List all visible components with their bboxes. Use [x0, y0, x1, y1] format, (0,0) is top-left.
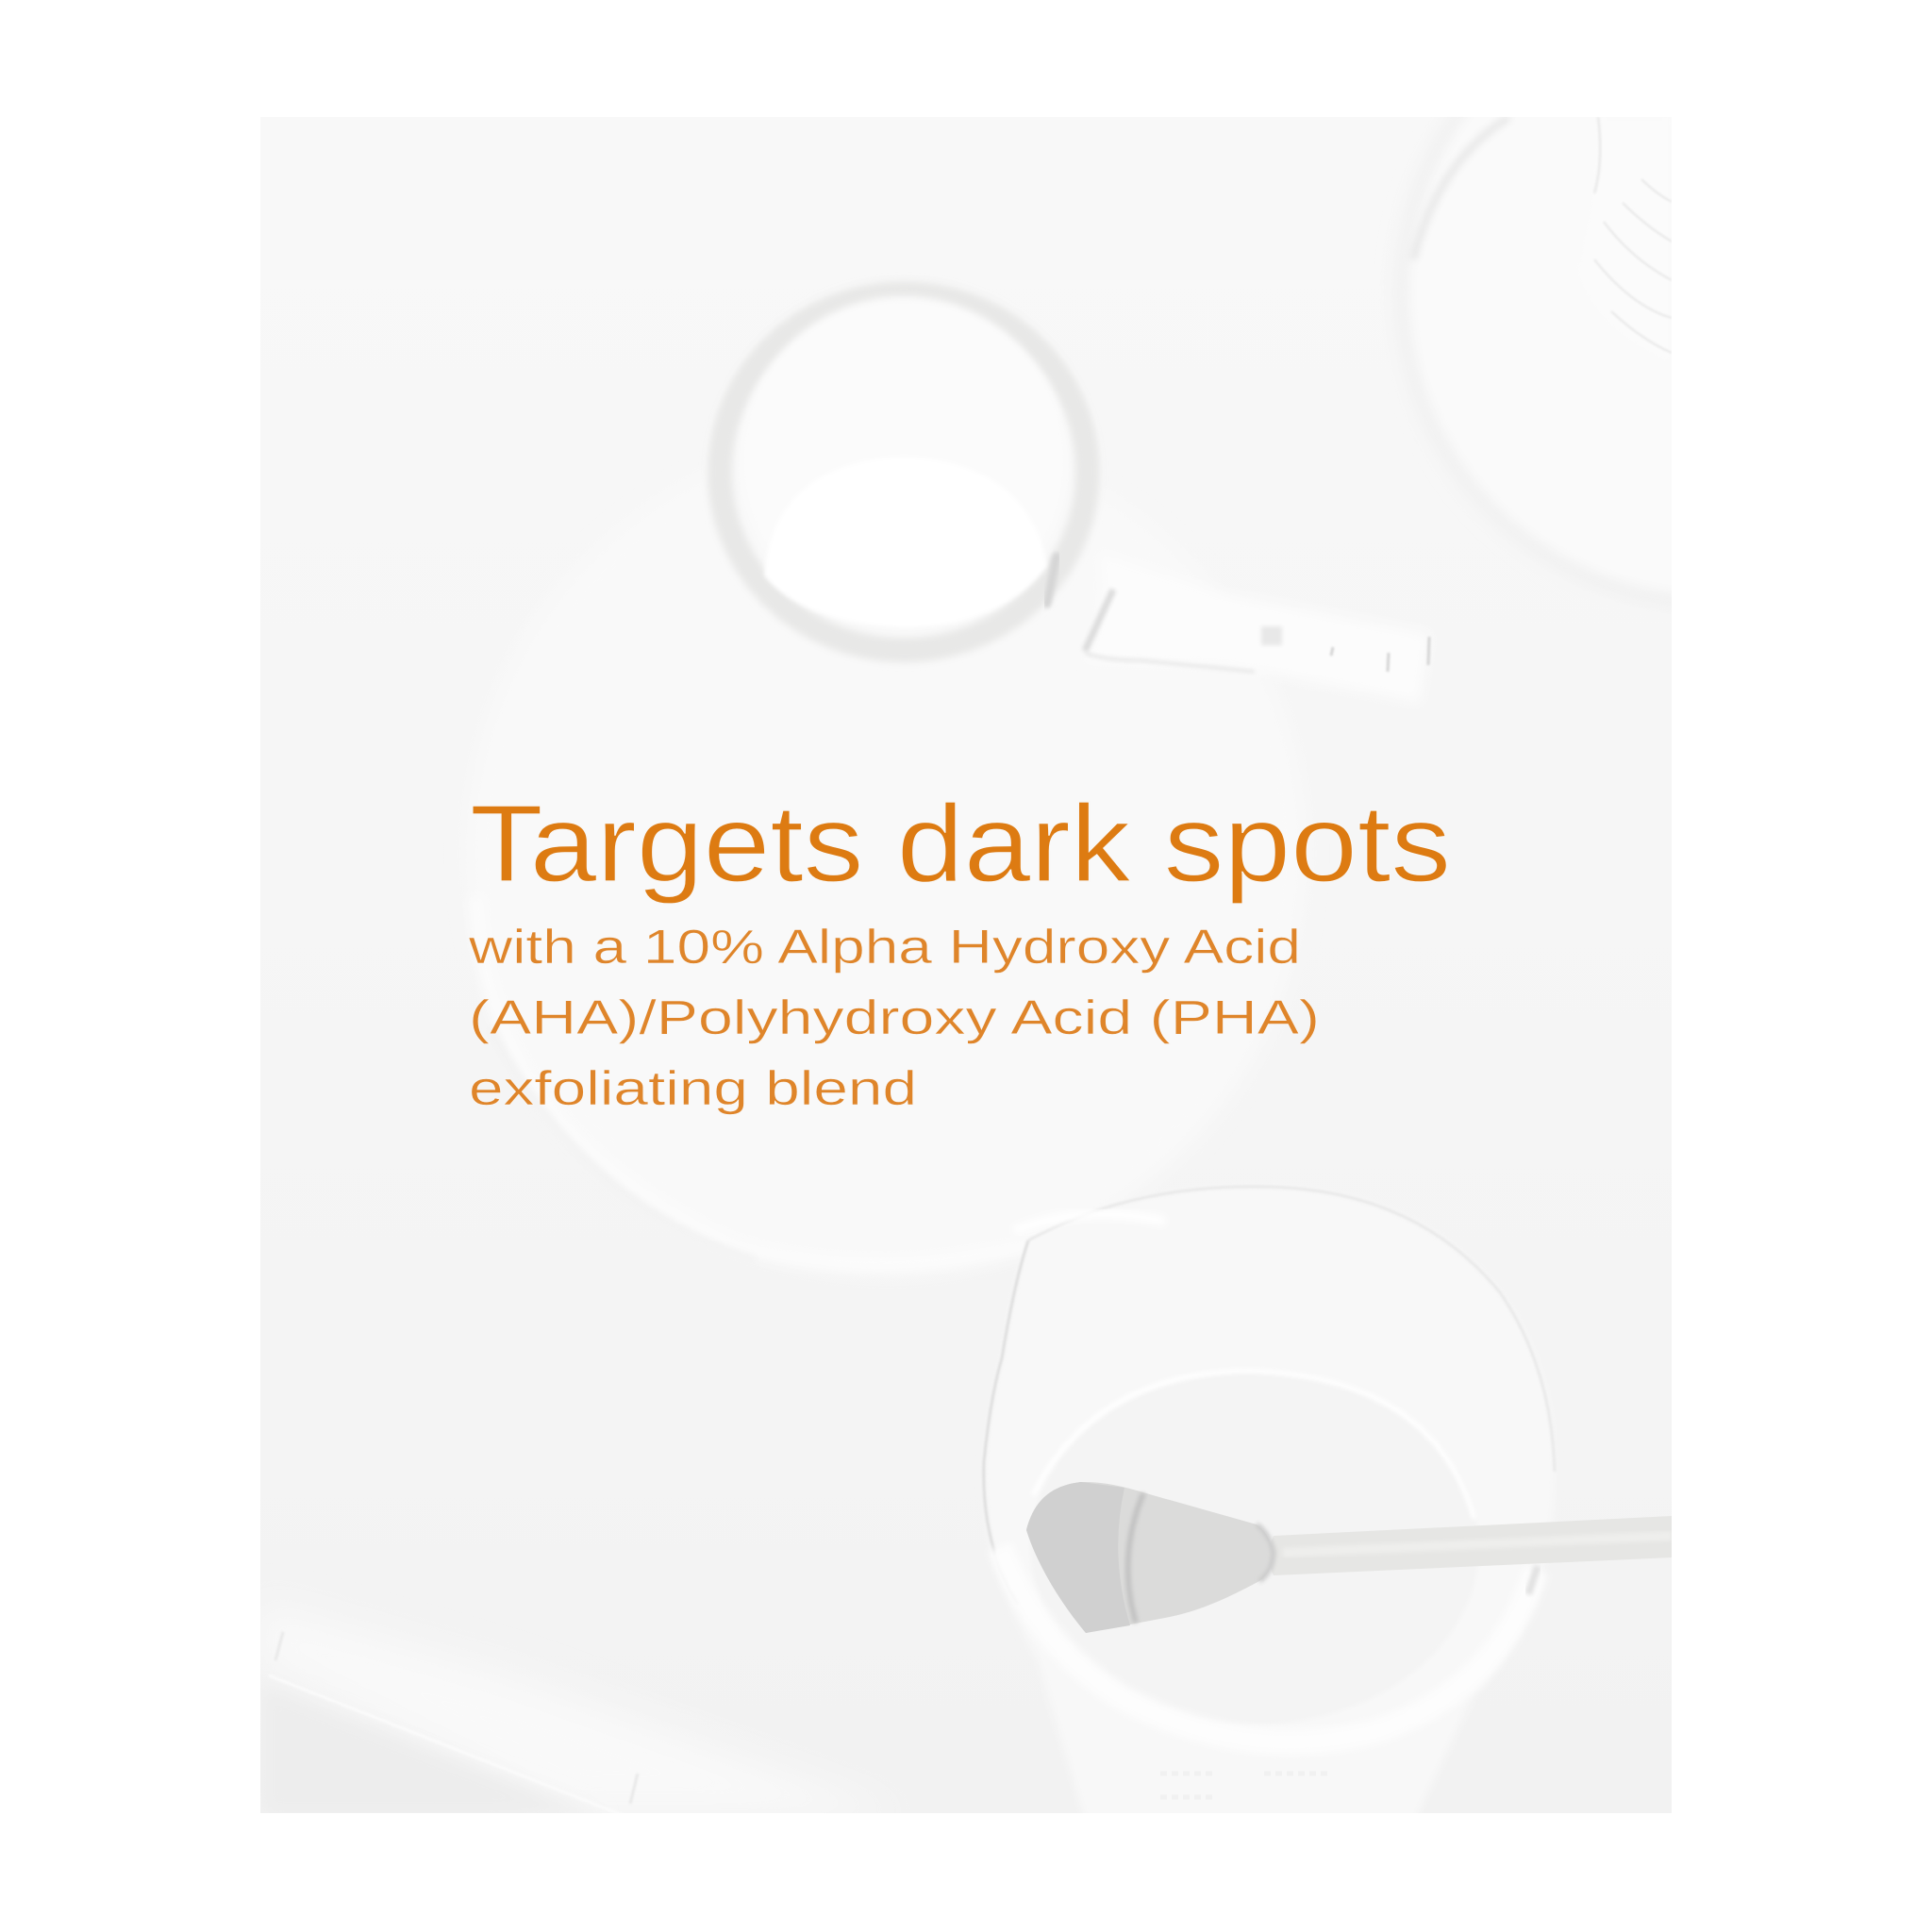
- subtitle text block: [468, 920, 1320, 1115]
- panel: faded laboratory glassware photo: [260, 117, 1672, 1813]
- photo: liquid surface: [1030, 1370, 1479, 1724]
- subtitle line 1: with a 10% Alpha Hydroxy Acid: [468, 920, 1301, 974]
- photo: small glass beaker with spout: [982, 1186, 1672, 1755]
- photo: flask body: [467, 434, 1307, 1274]
- photo: flask side tube: [1081, 589, 1431, 673]
- infographic canvas: [260, 117, 1672, 1813]
- subtitle line 3: exfoliating blend: [469, 1061, 917, 1115]
- photo: flask neck ring: [703, 278, 1105, 665]
- photo: spatula: [1026, 1482, 1672, 1633]
- title: Targets dark spots: [470, 782, 1451, 905]
- photo: glass test tube bottom left: [275, 1636, 608, 1809]
- photo: measuring beaker with graduation lines: [1594, 117, 1672, 353]
- photo: glass dish top right: [1410, 118, 1671, 353]
- subtitle line 2: (AHA)/Polyhydroxy Acid (PHA): [469, 991, 1320, 1044]
